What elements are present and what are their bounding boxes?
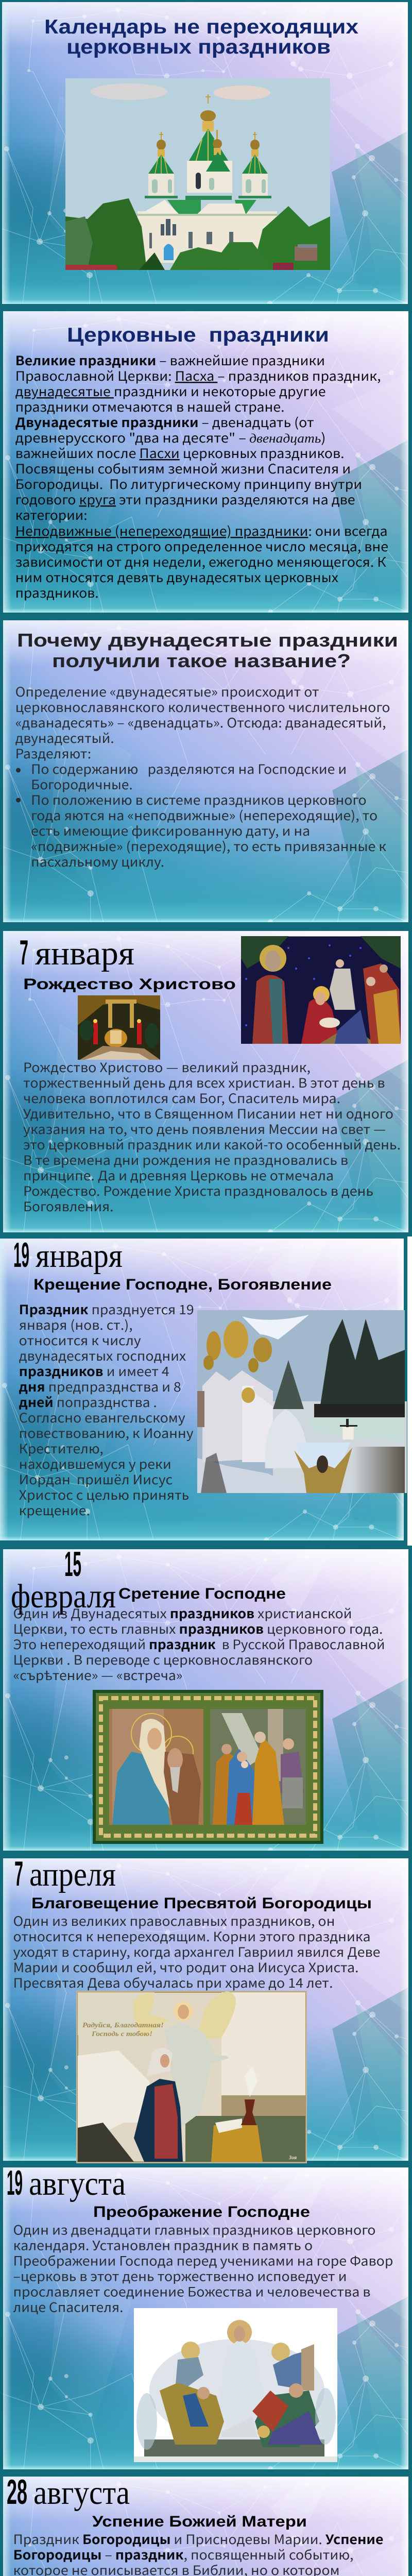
text block: Разделяют:: [15, 744, 91, 762]
text block: праздники отмечаются в нашей стране.: [15, 397, 285, 416]
panel: 19 January: [0, 1235, 407, 1548]
date: августа: [29, 2165, 126, 2202]
text block: Богородицы – праздник , посвященный событию,: [13, 2545, 353, 2564]
heading: Благовещение Пресвятой Богородицы: [31, 1895, 372, 1912]
text block: приходятся на строго определенное число месяца, вне: [15, 537, 388, 555]
image: icon of the Meeting: [93, 1690, 323, 1844]
text block: [13, 1604, 385, 1684]
text block: относится к числу: [19, 1331, 141, 1349]
text block: относится к непереходящим. Корни этого праздника: [13, 1927, 371, 1945]
text block: Удивительно, что в Священном Писании нет ни одного: [23, 1104, 393, 1123]
date: 28: [7, 2472, 27, 2512]
text block: Марии и сообщил ей, что родит она Иисуса Христа.: [13, 1958, 358, 1976]
date: апреля: [29, 1856, 116, 1893]
image: Transfiguration: [134, 2308, 337, 2462]
text block: Праздник Богородицы и Приснодевы Марии. Успение: [13, 2530, 383, 2548]
text block: категории:: [15, 505, 88, 524]
heading: Сретение Господне: [118, 1585, 286, 1602]
text block: торжественный день для всех христиан. В этот день в: [23, 1073, 385, 1092]
text block: календаря. Установлен праздник в память о: [13, 2236, 313, 2255]
heading: получили такое название?: [52, 650, 351, 671]
text block: В те времена дни рождения не праздновались в: [23, 1150, 348, 1169]
date: 7: [14, 1854, 23, 1893]
heading: Почему двунадесятые праздники: [17, 630, 398, 651]
title: Календарь не переходящих: [44, 16, 358, 38]
text block: церковнославянского количественного числительного: [15, 698, 390, 716]
text block: ним относятся девять двунадесятых церковных: [15, 568, 339, 586]
text block: Преображении Господа перед учениками на горе Фавор: [13, 2251, 393, 2270]
image: baptism: [197, 1310, 407, 1493]
text block: Один из Двунадесятых праздников христианской: [13, 1604, 352, 1622]
text block: Богородичные.: [31, 775, 133, 793]
date: августа: [33, 2474, 130, 2512]
text block: [23, 1058, 401, 1215]
text block: человека воплотился сам Бог, Спаситель мира.: [23, 1089, 340, 1107]
image: Annunciation: [76, 1991, 307, 2163]
text block: дней попразднства .: [19, 1393, 157, 1411]
text block: Согласно евангельскому: [19, 1408, 185, 1427]
text block: Иордан пришёл Иисус: [19, 1470, 173, 1488]
caption in icon: Зоя: [288, 2155, 297, 2161]
text block: Богоявления.: [23, 1197, 113, 1215]
text block: Христос с целью принять: [19, 1485, 189, 1504]
date: [11, 1545, 116, 1615]
text block: Церкви . В переводе с церковнославянского: [13, 1650, 313, 1669]
text block: Один из двенадцати главных праздников церковного: [13, 2221, 376, 2239]
text block: Двунадесятые праздники – двенадцать (от: [15, 413, 314, 431]
panel: 7 April: [0, 1854, 408, 2168]
text block: важнейших после Пасхи церковных праздников.: [15, 444, 345, 462]
heading: Успение Божией Матери: [92, 2513, 307, 2530]
text block: повествованию, к Иоанну: [19, 1423, 194, 1442]
text block: праздников.: [15, 583, 99, 602]
text block: Православной Церкви: Пасха – праздников праздник,: [15, 366, 381, 385]
text block: Рождество. Рождение Христа праздновалось в день: [23, 1181, 373, 1200]
text block: По содержанию разделяются на Господские и: [31, 759, 347, 778]
text block: Пресвятая Дева обучалась при храме до 14 лет.: [13, 1973, 333, 1992]
text block: указания на то, что день появления Мессии на свет —: [23, 1120, 386, 1138]
panel: church feasts: [0, 311, 408, 620]
date: 15: [64, 1545, 81, 1584]
panel: cover: [0, 2, 408, 311]
text block: По положению в системе праздников церковного: [31, 790, 367, 809]
text block: [13, 2221, 393, 2316]
date: [7, 2472, 130, 2512]
text block: Рождество Христово — великий праздник,: [23, 1058, 311, 1076]
text block: годового круга эти праздники разделяются на две: [15, 490, 355, 509]
text block: [15, 351, 388, 602]
text block: крещение.: [19, 1501, 90, 1519]
text block: Великие праздники – важнейшие праздники: [15, 351, 325, 369]
text block: января (нов. ст.),: [19, 1315, 133, 1334]
text block: пасхальному циклу.: [31, 852, 164, 871]
photo: church: [65, 78, 330, 270]
date: 19: [7, 2163, 23, 2202]
date: февраля: [11, 1578, 116, 1615]
caption in icon: Радуйся, Благодатная!: [82, 2022, 164, 2029]
caption in icon: [82, 2022, 297, 2161]
title: [44, 16, 358, 58]
panel: 19 August: [0, 2163, 408, 2477]
text block: есть имеющие фиксированную дату, и на: [31, 821, 310, 840]
text block: праздников и имеет 4: [19, 1362, 169, 1380]
panel: 7 January: [0, 931, 408, 1240]
text block: дня предпразднства и 8: [19, 1377, 181, 1396]
text block: Крестителю,: [19, 1439, 104, 1458]
text block: Определение «двунадесятые» происходит от: [15, 682, 319, 701]
panel: 15 February: [0, 1545, 408, 1858]
text block: двунадесятые праздники и некоторые другие: [15, 382, 326, 400]
date: января: [35, 935, 134, 972]
date: января: [36, 1237, 123, 1275]
text block: –церковь в этот день торжественно исповедует и: [13, 2267, 347, 2285]
image: candles: [78, 995, 160, 1060]
heading: Церковные праздники: [67, 324, 329, 346]
title: церковных праздников: [66, 36, 331, 58]
text block: Один из великих православных праздников, он: [13, 1911, 335, 1930]
text block: Неподвижные (непереходящие) праздники : они всегда: [15, 521, 388, 540]
text block: двунадесятых господних: [19, 1346, 186, 1365]
text block: [15, 682, 390, 871]
text block: двунадесятый.: [15, 728, 114, 747]
text block: древнерусского "два на десяте" – двенадцать ): [15, 428, 326, 447]
caption in icon: Господь с тобою!: [91, 2030, 152, 2038]
text block: уходят в старину, когда архангел Гавриил явился Деве: [13, 1942, 380, 1961]
text block: [13, 2530, 398, 2576]
text block: Праздник празднуется 19: [19, 1300, 194, 1318]
text block: «подвижные» (переходящие), то есть привязанные к: [31, 837, 386, 855]
image: nativity scene: [241, 936, 401, 1044]
text block: принципе. Да и древняя Церковь не отмечала: [23, 1166, 334, 1184]
heading: Рождество Христово: [23, 976, 236, 993]
text block: [13, 1911, 380, 1992]
text block: Это непереходящий праздник в Русской Православной: [13, 1635, 385, 1653]
date: 7: [20, 933, 28, 972]
text block: «сърѣтение» — «встреча»: [13, 1666, 182, 1684]
date: 19: [13, 1235, 29, 1275]
text block: Посвящены событиям земной жизни Спасителя и: [15, 459, 351, 478]
text block: прославляет соединение Божества и человечества в: [13, 2282, 370, 2301]
text block: «дванадесять» – «двенадцать». Отсюда: дванадесятый,: [15, 713, 386, 732]
text block: [19, 1300, 194, 1519]
text block: Богородицы. По литургическому принципу внутри: [15, 474, 362, 493]
panel: why twelve: [0, 620, 408, 929]
text block: лице Спасителя.: [13, 2298, 124, 2316]
heading: Преображение Господне: [93, 2204, 310, 2221]
heading: [17, 630, 398, 671]
text block: это церковный праздник или какой-то особенный день.: [23, 1135, 401, 1154]
text block: находившемуся у реки: [19, 1454, 171, 1473]
text block: года яются на «неподвижные» (непереходящие), то: [31, 806, 377, 824]
heading: Крещение Господне, Богоявление: [33, 1276, 332, 1293]
panel: 28 August: [0, 2472, 408, 2576]
text block: зависимости от дня недели, ежегодно меняющегося. К: [15, 552, 386, 571]
text block: Церкви, то есть главных праздников церковного года.: [13, 1619, 383, 1638]
